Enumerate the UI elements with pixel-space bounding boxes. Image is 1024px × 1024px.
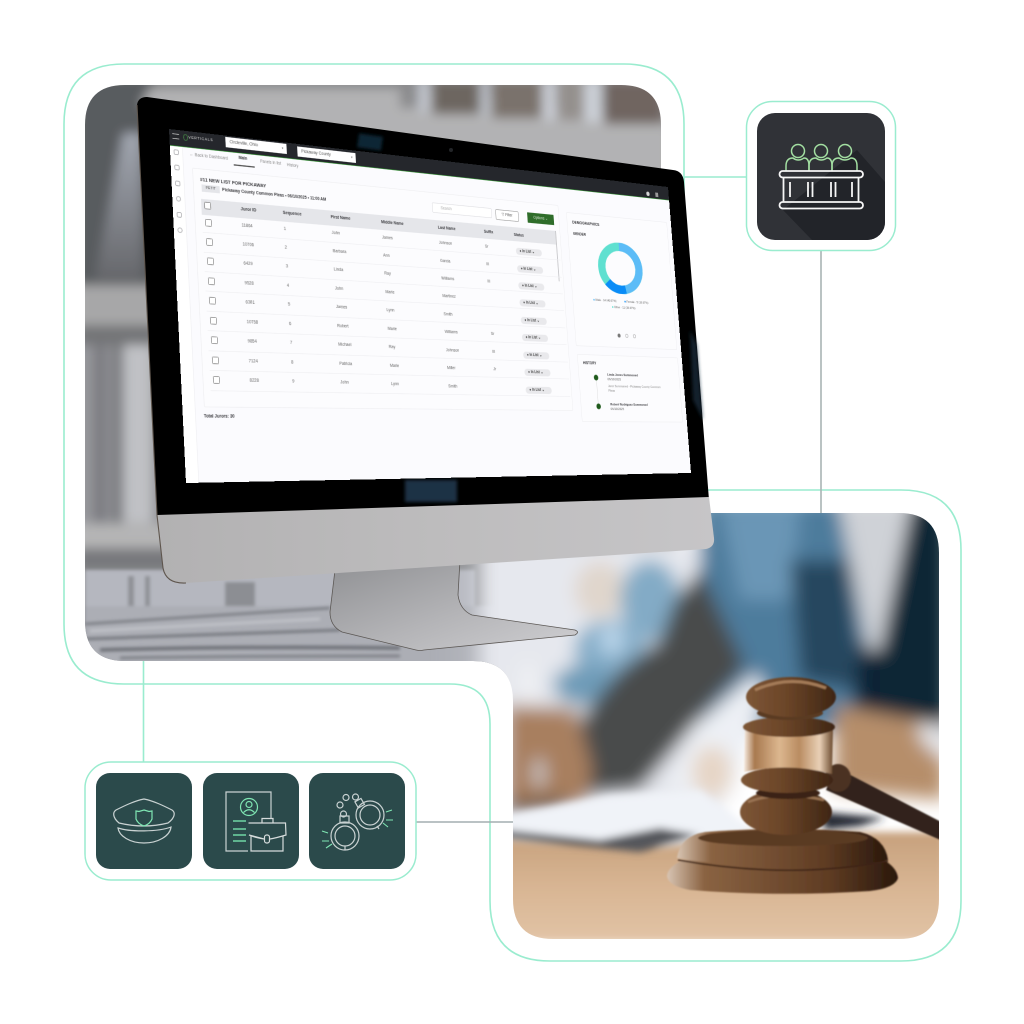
table row 2: Ann — [383, 253, 390, 258]
table row 1: 1 — [284, 226, 286, 231]
icon: briefcase — [248, 818, 286, 851]
history panel — [577, 354, 683, 422]
history note: Juror Summoned - Pickaway County Common — [608, 385, 661, 389]
jury icon tile — [757, 113, 885, 240]
gender donut chart — [598, 242, 643, 294]
table row 7: Michael — [338, 343, 352, 347]
table column labels: Status — [514, 233, 524, 238]
icon: three jurors — [786, 144, 857, 171]
table row 1: ● In List ⌄ — [520, 249, 535, 254]
photo layer: blurred person in blue shirt — [460, 513, 939, 818]
table row 7: 9854 — [248, 339, 257, 344]
demographics panel — [566, 212, 677, 350]
table row 2: 2 — [285, 245, 287, 250]
table row 9: 8228 — [250, 378, 259, 383]
table scrollbar — [555, 231, 560, 281]
table row 7: III — [492, 350, 495, 354]
table row 6: Williams — [445, 330, 458, 335]
nav icons — [174, 149, 183, 233]
timeline dot 1 — [594, 375, 598, 381]
list subtitle: Pickaway County Common Pleas • 06/10/2025 • 11:00 AM — [222, 188, 326, 202]
tabs — [234, 156, 298, 169]
table row 9 — [210, 376, 570, 396]
table row 2: Barbara — [333, 249, 346, 254]
monitor frame — [137, 97, 714, 583]
search field: Search — [441, 206, 452, 211]
table row 7: Johnson — [446, 348, 459, 353]
county selector: ▾ — [351, 156, 353, 160]
table row 5: 6381 — [245, 300, 255, 305]
table row 8: Patricia — [339, 361, 352, 366]
table row 6: Robert — [337, 324, 349, 329]
jury icon frame — [746, 102, 896, 250]
menu icon — [172, 133, 179, 139]
list title: #11 NEW LIST FOR PICKAWAY — [200, 176, 266, 189]
table row 4: 9528 — [244, 281, 254, 286]
table row 2: ● In List ⌄ — [521, 266, 536, 271]
logo text: VERTICALS — [188, 136, 213, 143]
table row 6: Marie — [388, 327, 397, 331]
table row 5: 5 — [288, 302, 290, 307]
history item 2 — [610, 403, 648, 411]
table column labels — [204, 202, 524, 238]
options button — [527, 212, 554, 225]
city selector — [225, 137, 287, 154]
table column labels: Last Name — [438, 226, 456, 231]
table row 4: John — [335, 286, 343, 291]
table row 3: Williams — [441, 276, 454, 281]
table row 9: 9 — [292, 379, 295, 384]
table row 6: 6 — [289, 322, 291, 326]
table row 4: 4 — [287, 283, 289, 288]
table row 2: 10706 — [242, 242, 254, 248]
table row 8: Jr — [493, 367, 496, 372]
table row 1: John — [332, 230, 340, 235]
table row 9: John — [340, 380, 349, 385]
table row 1: James — [382, 235, 393, 240]
table row 7: 7 — [290, 341, 292, 345]
table row 1: 11864 — [241, 223, 253, 228]
legend: ■ Female · 5 (16.67%) — [624, 300, 648, 305]
search field — [432, 202, 492, 218]
jury icon long shadow — [783, 150, 885, 240]
history item 1: Linda Jones Summoned — [607, 373, 638, 378]
table row 1: Johnson — [439, 241, 452, 246]
table row 5: ● In List ⌄ — [524, 318, 540, 323]
tile: police hat — [96, 773, 192, 869]
photo layer: marble desk streaks — [85, 608, 400, 658]
table row 7 — [208, 336, 568, 362]
table row 5: James — [336, 305, 347, 310]
photo layer: wooden table — [505, 832, 945, 942]
photo layer: under-monitor shelf — [85, 570, 495, 666]
table row 9: ● In List ⌄ — [529, 388, 544, 392]
city selector: ▾ — [282, 147, 283, 150]
icon: handcuffs — [331, 794, 384, 850]
table row 8 — [210, 356, 568, 379]
monitor chin — [157, 497, 714, 583]
table row 9: Smith — [448, 384, 457, 389]
monitor camera — [449, 148, 453, 152]
demographics heading: DEMOGRAPHICS — [572, 219, 600, 227]
legend — [593, 298, 648, 310]
table row 8: Miller — [447, 366, 456, 371]
tab: history: History — [287, 163, 298, 169]
table row 3: ● In List ⌄ — [522, 283, 537, 288]
connector: photo to law enforcement icons — [142, 661, 144, 773]
mint outline around photos — [64, 64, 961, 961]
globe icon — [646, 191, 650, 196]
total jurors: Total Jurors: 30 — [204, 414, 235, 419]
legend: ■ Other · 11 (36.67%) — [612, 306, 636, 310]
legend: ■ Male · 14 (46.67%) — [593, 298, 617, 303]
table column labels: Juror ID — [241, 207, 256, 213]
history item 2: Robert Rodriguez Summoned — [610, 403, 648, 407]
table row 3: 6429 — [243, 262, 253, 267]
monitor bezel — [137, 97, 709, 518]
connector: jury icon to gavel photo — [820, 240, 822, 513]
table row 5 — [207, 296, 565, 328]
tile: person record and briefcase — [203, 773, 299, 869]
header icons — [646, 192, 658, 198]
monitor left edge highlight — [137, 105, 186, 583]
history heading: HISTORY — [583, 361, 596, 366]
petit tag — [201, 184, 220, 193]
timeline line — [596, 378, 599, 407]
table header — [201, 199, 557, 245]
table row 4 — [206, 277, 564, 311]
tab: panels in list: Panels in list — [260, 159, 281, 166]
table row 4: ● In List ⌄ — [523, 301, 538, 306]
options button: Options ⌄ — [533, 215, 548, 221]
table row 4: Martinez — [442, 294, 456, 299]
table row 3: 3 — [286, 264, 288, 269]
photo layer: gavel — [667, 677, 945, 894]
timeline dot 2 — [596, 403, 601, 409]
photo layer: papers and clipboard — [505, 790, 885, 852]
icon: profile document — [226, 792, 271, 851]
table row 3: Ray — [384, 272, 391, 276]
table row 5: Lynn — [386, 308, 395, 313]
table row 7: Ray — [389, 345, 396, 350]
history item 2: 06/10/2025 — [611, 407, 624, 411]
monitor stand — [330, 560, 578, 650]
table row 9: Lynn — [391, 382, 399, 387]
history item 1 — [607, 373, 638, 382]
table row 8: ● In List ⌄ — [528, 370, 543, 375]
table row 6: 10758 — [247, 320, 258, 325]
petit tag: PETIT — [205, 186, 216, 191]
filter button — [495, 209, 519, 222]
tile: handcuffs — [309, 773, 405, 869]
active tab underline — [234, 164, 255, 167]
city selector: Circleville, Ohio — [229, 140, 258, 148]
table row 1: Sr — [485, 244, 489, 249]
history item 1: 06/10/2025 — [607, 377, 621, 382]
county selector: Pickaway County — [301, 149, 331, 157]
table row 6: Sr — [491, 332, 494, 336]
back link: ← Back to Dashboard — [190, 152, 228, 161]
table row 3: III — [487, 279, 490, 284]
history note: Pleas — [608, 389, 615, 393]
carousel dots — [618, 334, 636, 338]
history note — [608, 384, 661, 393]
photo: office shelves and courtroom desk — [75, 75, 950, 942]
icon: handcuff sparks — [322, 810, 393, 848]
connector: monitor to jury icon — [684, 176, 757, 178]
table row 3 — [205, 258, 562, 294]
table row 1 — [203, 219, 559, 260]
jury list card — [192, 168, 573, 411]
tab: main: Main — [238, 156, 247, 161]
brand logo — [183, 134, 213, 143]
table row 8: 7124 — [249, 359, 258, 364]
table row 2: Garcia — [440, 259, 451, 264]
table row 2: III — [486, 262, 489, 266]
connector: law enforcement icons to gavel photo — [405, 821, 513, 823]
table row 8: Marie — [390, 364, 399, 368]
table row 5: Smith — [443, 312, 453, 317]
table row 4: Marie — [385, 290, 395, 295]
table row 7: ● In List ⌄ — [527, 353, 542, 357]
table column labels: Sequence — [283, 210, 302, 216]
table column labels: Suffix — [484, 230, 493, 235]
app header bar — [169, 129, 669, 200]
header checkbox — [204, 201, 211, 209]
icon: jury box — [780, 171, 863, 208]
user icon — [655, 192, 658, 197]
monitor screen: juror list app — [169, 129, 691, 483]
county selector — [297, 146, 356, 163]
table row 3: Linda — [334, 268, 343, 273]
law enforcement icons frame — [85, 762, 416, 880]
table row 2 — [204, 238, 562, 278]
logo mark — [183, 134, 188, 141]
side navigation — [170, 146, 199, 483]
icon: police hat — [114, 799, 174, 843]
table row 6: ● In List ⌄ — [526, 335, 541, 340]
photo layer: blurred bookshelf — [75, 75, 675, 675]
table column labels: First Name — [331, 215, 351, 221]
filter button: ▽ Filter — [502, 213, 513, 218]
table row 6 — [208, 316, 566, 345]
bezel reflection — [357, 133, 703, 502]
table row 8: 8 — [291, 360, 293, 365]
gender heading: GENDER — [573, 232, 586, 237]
table column labels: Middle Name — [381, 220, 404, 226]
